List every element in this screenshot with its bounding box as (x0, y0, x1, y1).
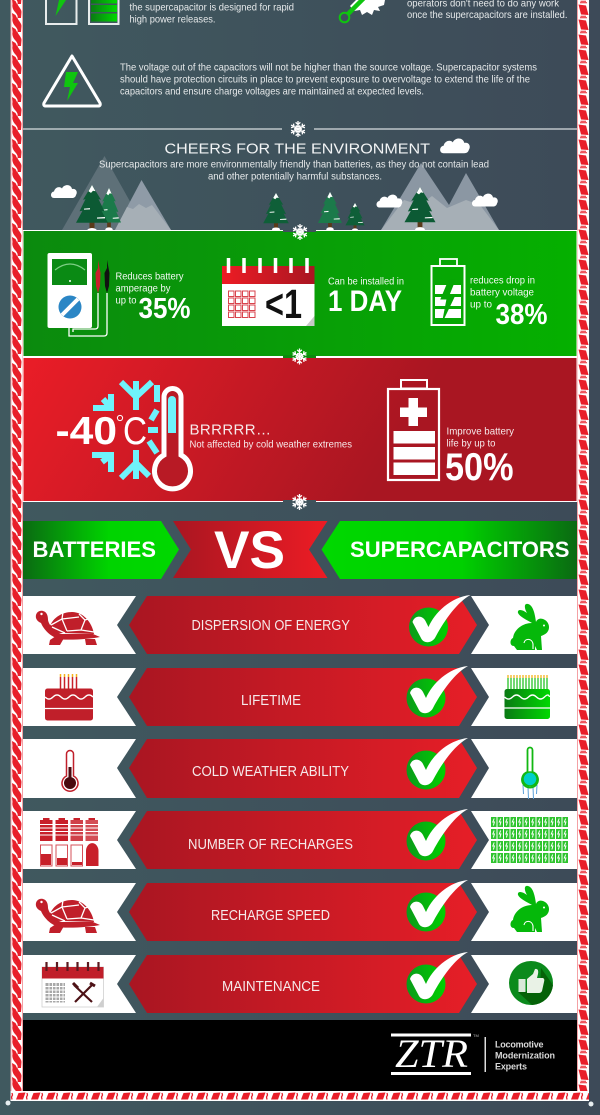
icon: rabbit (510, 886, 549, 932)
banner: vs (173, 521, 328, 580)
icon: check mark (406, 666, 468, 718)
section: cheers for the environment (51, 139, 499, 233)
icon: calendar with tools (42, 962, 104, 1007)
icon: rabbit (510, 604, 549, 650)
stat: minus 40 celsius: C (123, 410, 147, 453)
row: cold weather ability: COLD WEATHER ABILITY (192, 764, 349, 780)
divider with snowflake (23, 121, 577, 137)
text: environment description: and other potentially harmful substances. (208, 170, 382, 182)
text: tagline: Modernization (495, 1050, 555, 1060)
icon: check mark (409, 595, 470, 646)
stat: improve battery life 50%: 50% (445, 446, 514, 489)
panel: green stats (23, 230, 577, 356)
text: environment description: Supercapacitors are more environmentally friendly than batteries, as they do not contain lead (99, 158, 489, 170)
stat: reduces voltage drop 38%: battery voltage (470, 286, 534, 298)
icon: battery with plus (388, 380, 439, 480)
logo: ZTR: TM (473, 1033, 479, 1038)
row: maintenance: MAINTENANCE (222, 979, 320, 995)
logo: ZTR: ZTR (395, 1031, 468, 1076)
icon: red battery grid (40, 818, 98, 866)
icon: empty battery with bolt (46, 0, 76, 24)
icon: thermometer (154, 388, 190, 489)
icon: heading cloud (440, 139, 470, 153)
icon: check mark (406, 809, 468, 860)
icon: calendar less than one (222, 258, 314, 327)
text: brrrrr: BRRRRR… (190, 422, 271, 438)
stat: improve battery life 50%: Improve battery (446, 426, 515, 438)
text: rapid power releases: high power releases. (130, 14, 216, 26)
icon: green cake (504, 675, 550, 719)
icon: check mark (406, 952, 468, 1004)
stat: installed in 1 day: 1 DAY (328, 285, 402, 318)
text: brrrrr (190, 422, 352, 450)
heading: cheers for the environment: CHEERS FOR THE ENVIRONMENT (164, 140, 430, 158)
text: voltage protection paragraph: The voltage out of the capacitors will not be higher than the source voltage. Supercapacitor systems (120, 62, 537, 74)
icon: check mark (406, 738, 468, 790)
banner: supercapacitors (322, 521, 577, 579)
icon: red cake (45, 674, 93, 720)
stat: installed in 1 day: Can be installed in (328, 276, 404, 288)
stat: reduces voltage drop 38%: reduces drop in (470, 274, 535, 286)
stat: improve battery life 50%: life by up to (446, 438, 496, 450)
stat: reduces amperage 35% (116, 270, 191, 325)
stat: minus 40 celsius (56, 410, 147, 453)
row: dispersion of energy (23, 595, 577, 654)
icon: wrench and gear (340, 0, 385, 22)
stat: improve battery life 50% (445, 426, 515, 489)
icon: voltage warning triangle (44, 56, 100, 106)
row: cold weather ability (23, 738, 577, 799)
row: number of recharges (23, 809, 577, 869)
row: recharge speed (23, 880, 577, 941)
stat: reduces amperage 35%: Reduces battery (116, 270, 184, 282)
banner: supercapacitors: SUPERCAPACITORS (350, 537, 570, 562)
banner: batteries (23, 521, 179, 579)
row: dispersion of energy: DISPERSION OF ENERGY (192, 618, 350, 634)
icon: turtle (36, 899, 100, 933)
icon: charging battery (432, 259, 464, 325)
text: tagline: Locomotive (495, 1040, 544, 1050)
icon: cyan snowflake (92, 381, 158, 479)
stat: reduces voltage drop 38%: up to (470, 298, 492, 310)
icon: multimeter (48, 253, 110, 336)
icon: red thermometer (62, 750, 78, 791)
panel: red cold weather stats (23, 358, 577, 502)
stat: reduces amperage 35%: amperage by (116, 282, 171, 294)
icon: turtle (36, 611, 100, 645)
stat: reduces voltage drop 38% (470, 274, 548, 331)
text: voltage protection paragraph: should have protection circuits in place to prevent exposure to overvoltage to extend the life of the (120, 74, 530, 86)
icons: clouds (51, 185, 498, 208)
illustration: mountains (62, 156, 499, 230)
row: lifetime: LIFETIME (241, 693, 301, 709)
icon: calendar less than one: <1 (265, 281, 302, 327)
text: rapid power releases (130, 2, 294, 26)
text: rapid power releases: the supercapacitor is designed for rapid (130, 2, 294, 14)
row: recharge speed: RECHARGE SPEED (211, 908, 330, 924)
text: environment description (99, 158, 489, 182)
icon: check mark (406, 880, 468, 932)
row: number of recharges: NUMBER OF RECHARGES (188, 837, 353, 853)
row: lifetime (23, 666, 577, 726)
stat: minus 40 celsius: -40 (56, 410, 117, 453)
icon: green thermometer (522, 748, 538, 799)
banner: batteries: BATTERIES (32, 537, 156, 562)
row: maintenance (23, 952, 577, 1013)
icon: full battery (89, 0, 118, 24)
panel: power release and maintenance (46, 0, 568, 26)
text: no operator work: once the supercapacitors are installed. (407, 9, 568, 21)
icon: thumbs up (509, 961, 553, 1005)
stat: reduces amperage 35%: up to (116, 294, 137, 306)
illustration: trees (76, 185, 436, 233)
banner: vs: VS (214, 521, 285, 580)
stat: reduces amperage 35%: 35% (138, 293, 191, 325)
text: voltage protection paragraph (120, 62, 537, 98)
versus banner (23, 521, 577, 580)
icon: green battery grid (491, 817, 569, 863)
text: tagline (495, 1040, 555, 1072)
text: tagline: Experts (495, 1062, 527, 1072)
text: voltage protection paragraph: capacitors and ensure charge voltages are maintained at expected levels. (120, 86, 424, 98)
text: brrrrr: Not affected by cold weather extremes (190, 438, 352, 450)
stat: reduces voltage drop 38%: 38% (496, 299, 548, 331)
snowflake separators (283, 224, 316, 510)
text: no operator work (407, 0, 568, 21)
footer panel (23, 1020, 577, 1091)
